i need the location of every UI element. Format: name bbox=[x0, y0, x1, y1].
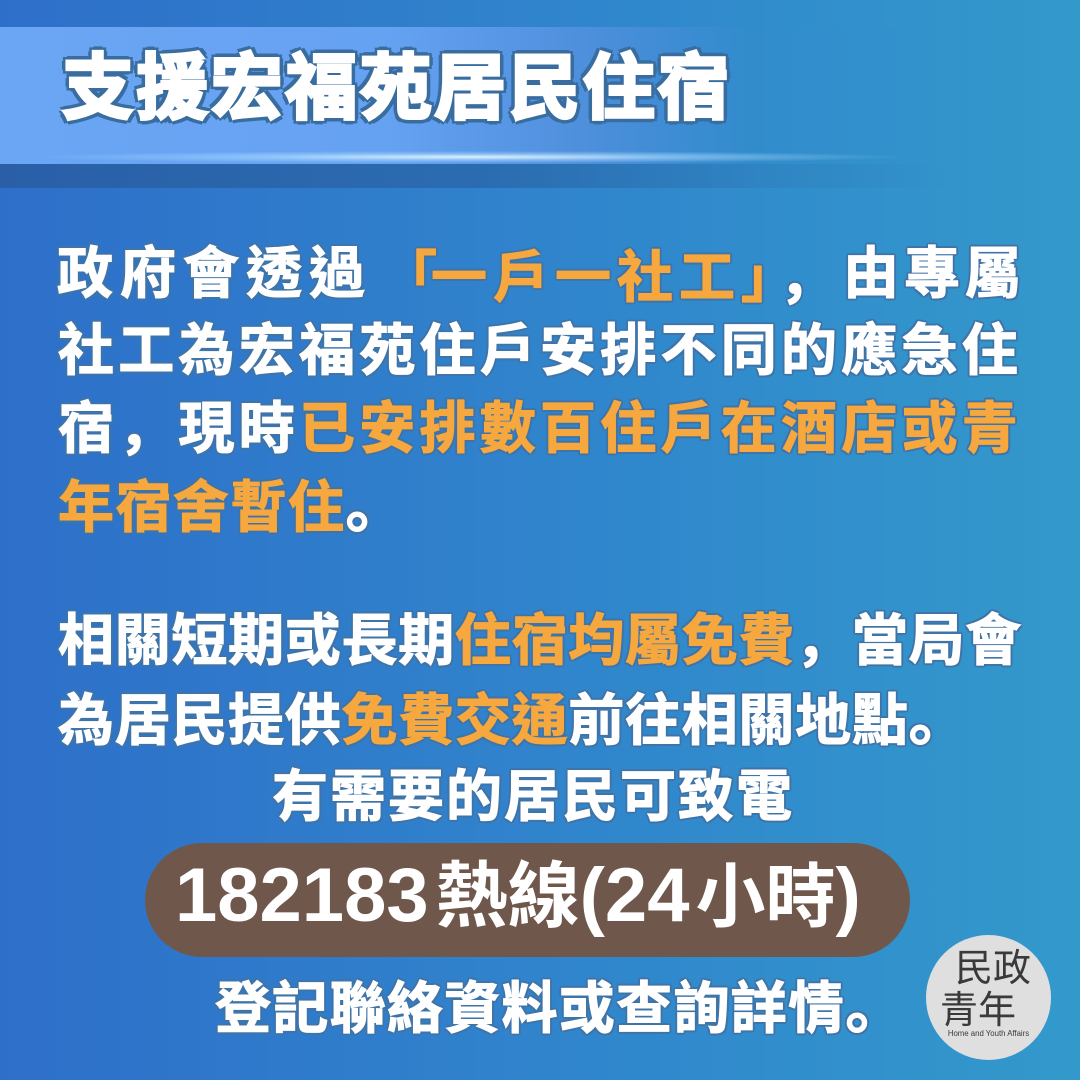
paragraph 1 bbox=[56, 233, 1026, 545]
logo: home and youth affairs: 青年 bbox=[940, 990, 1016, 1032]
call to action text: 有需要的居民可致電 bbox=[272, 765, 794, 828]
enquiry text: 登記聯絡資料或查詢詳情。 bbox=[215, 959, 907, 1046]
paragraph 1: 政府會透過 bbox=[57, 242, 372, 305]
paragraph 1: 年宿舍暫住。 bbox=[58, 458, 407, 545]
logo: home and youth affairs: 民政 bbox=[955, 948, 1031, 990]
paragraph 2: 相關短期或長期住宿均屬免費，當局會 bbox=[58, 596, 1022, 677]
paragraph 1: 宿，現時已安排數百住戶在酒店或青 bbox=[58, 384, 1022, 465]
paragraph 2 bbox=[56, 596, 1023, 758]
hotline pill bbox=[145, 843, 910, 957]
hotline number: 182183熱線(24小時) bbox=[175, 853, 861, 938]
paragraph 2: 為居民提供免費交通前往相關地點。 bbox=[58, 671, 969, 758]
paragraph 1: 「 bbox=[381, 233, 437, 314]
title banner bbox=[0, 27, 882, 188]
title: 支援宏福苑居民住宿 bbox=[62, 49, 732, 129]
paragraph 1: 由專屬 bbox=[843, 242, 1026, 305]
logo: home and youth affairs: Home and Youth Affairs bbox=[948, 1029, 1029, 1038]
paragraph 1: 社工為宏福苑住戶安排不同的應急住 bbox=[58, 319, 1022, 382]
logo: home and youth affairs bbox=[926, 935, 1051, 1060]
paragraph 1: 一戶一社工」 bbox=[431, 233, 803, 314]
paragraph 1: ， bbox=[779, 233, 835, 314]
